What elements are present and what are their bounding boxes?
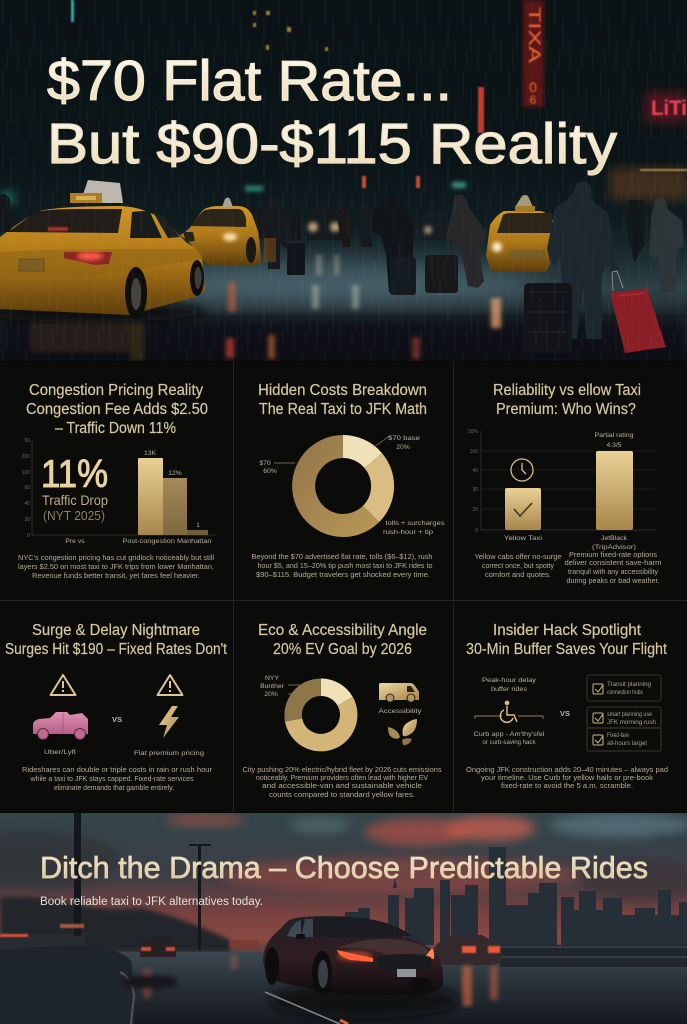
bar chart: 40 (24, 501, 30, 507)
body text: hour $5, and 15–20% tip push most taxi to JFK rides to (258, 561, 432, 570)
bar chart: 1 (196, 522, 200, 529)
icon: van: Accessibility (378, 708, 422, 715)
body text: NYC's congestion pricing has cut gridlock noticeably but still (18, 553, 214, 562)
body text (242, 765, 442, 799)
heading: Surge & Delay Nightmare (32, 622, 200, 639)
body text: Beyond the $70 advertised flat rate, tolls ($6–$12), rush (252, 552, 432, 561)
bar chart: 50% (468, 429, 479, 435)
lamp posts (74, 810, 211, 950)
body text: your timeline. Use Curb for yellow hails or pre-book (481, 773, 653, 782)
taxi: third, right (486, 195, 554, 272)
wheels (312, 951, 332, 995)
icon: warning right (158, 675, 182, 695)
premium text: deliver consistent save-harm (564, 558, 662, 567)
vs label: VS (560, 709, 570, 718)
bar chart: 4.3/5 (606, 442, 622, 449)
donut labels (259, 435, 445, 536)
bar chart: 20 (472, 507, 478, 513)
checklist: connection hubs (607, 690, 643, 696)
left note: or curb-saving hack (482, 739, 536, 746)
heading (258, 382, 427, 418)
bar chart: Post-congestion Manhattan (122, 538, 212, 545)
panel: hidden costs (234, 362, 453, 600)
body text: and accessible-van and sustainable vehicle (262, 781, 422, 790)
bar chart: 0 (27, 533, 30, 539)
icon: check mark (514, 503, 532, 516)
labels: Uber/Lyft (44, 749, 76, 756)
checklist: Transit planning (607, 682, 651, 688)
travellers with luggage (0, 182, 684, 353)
heading: The Real Taxi to JFK Math (259, 401, 427, 418)
bar chart: 30 (472, 487, 478, 493)
heading: – Traffic Down 11% (55, 420, 176, 437)
heading (466, 622, 668, 658)
left barrier (0, 934, 134, 1024)
clouds (0, 813, 687, 902)
black sedan (263, 916, 443, 996)
wet road reflections (30, 255, 501, 360)
donut label: 20% (264, 691, 278, 698)
bar chart: 100 (470, 449, 478, 455)
donut labels: 20% (396, 444, 410, 451)
shadow under car (270, 982, 460, 1018)
panel: surge and delay (0, 601, 233, 812)
bar chart: Pre vs (65, 538, 85, 545)
body text (22, 765, 213, 792)
body text: fixed-rate to avoid the 5 a.m. scramble. (501, 781, 633, 790)
stat: 11% traffic drop (41, 453, 108, 523)
premium text (564, 550, 662, 585)
heading (258, 622, 427, 658)
right guard rail (500, 945, 687, 967)
donut label (260, 675, 300, 698)
checklist: all-hours target (607, 741, 647, 747)
road (118, 952, 687, 1024)
neon signs: TIXA (525, 7, 544, 64)
taillight (64, 252, 112, 265)
donut labels: rush-hour + tip (383, 529, 433, 536)
icon: van (378, 683, 422, 715)
neon signs: 6 (530, 93, 537, 107)
donut labels: 60% (263, 468, 277, 475)
donut chart (304, 446, 383, 525)
labels (44, 749, 204, 757)
plate (19, 259, 44, 271)
bar chart: 20 (24, 517, 30, 523)
hero title: $70 Flat Rate... (47, 49, 452, 113)
body text: counts compared to standard yellow fares. (269, 790, 415, 799)
heading (26, 382, 208, 437)
checklist: smart planning use (607, 712, 653, 718)
heading: 20% EV Goal by 2026 (273, 641, 412, 658)
icon: pink car (33, 712, 88, 740)
neon signs: LiTi (651, 97, 687, 120)
left note: Curb app - Am'thy'sfel (474, 731, 545, 738)
neon signs: 0 (529, 79, 537, 95)
donut labels: tolls + surcharges (386, 520, 445, 527)
body text: Revenue funds better transit, yet fares feel heavier. (32, 571, 200, 580)
hero title (47, 49, 618, 176)
premium text: during peaks or bad weather. (566, 576, 660, 585)
footer subtext: Book reliable taxi to JFK alternatives today. (40, 896, 263, 908)
wheels (125, 267, 147, 319)
plate (397, 969, 416, 977)
heading: Reliability vs ellow Taxi (493, 382, 641, 399)
donut chart (293, 687, 349, 743)
bar chart: JetBlack (601, 535, 628, 542)
panel: insider hack (454, 601, 687, 812)
icon: clock (511, 459, 533, 481)
yellow taxi text (474, 552, 562, 579)
premium text: tranquil with any accessibility (568, 567, 658, 576)
bar chart: 40 (472, 468, 478, 474)
skyline (345, 847, 687, 945)
donut label: Bunther (260, 683, 285, 690)
heading: Insider Hack Spotlight (493, 622, 642, 639)
bar chart (468, 429, 655, 551)
footer heading: Ditch the Drama – Choose Predictable Rides (40, 850, 648, 885)
labels: Flat premium pricing (134, 750, 204, 757)
left note (474, 677, 545, 746)
body text: Ongoing JFK construction adds 20–40 minutes – always pad (466, 765, 668, 774)
body text (18, 553, 214, 580)
checklist (587, 675, 661, 751)
yellow taxi text: comfort and quotes. (485, 570, 551, 579)
bar chart: (TripAdvisor) (592, 544, 636, 551)
panel: eco and accessibility (234, 601, 453, 812)
second car (434, 935, 502, 965)
vs label: VS (112, 715, 122, 724)
building window lights (253, 11, 328, 51)
checklist: JFK morning rush (607, 720, 656, 726)
yellow taxi text: correct once, but spotty (482, 561, 554, 570)
body text (252, 552, 432, 579)
bar chart: 200 (22, 454, 30, 460)
background car (305, 218, 447, 240)
heading: Surges Hit $190 – Fixed Rates Don't (5, 641, 228, 658)
stat: 11% traffic drop: 11% (41, 453, 108, 496)
panel: congestion pricing (0, 362, 233, 600)
heading: 30-Min Buffer Saves Your Flight (466, 641, 668, 658)
bar chart (22, 438, 215, 545)
hill and treeline, left (0, 897, 230, 952)
heading: Hidden Costs Breakdown (258, 382, 427, 399)
body text: $90–$115. Budget travelers get shocked every time. (256, 570, 430, 579)
body text: while a taxi to JFK stays capped. Fixed-rate services (30, 774, 194, 783)
footer: dusk highway scene (0, 810, 687, 1024)
checklist: Fixed-fare (607, 733, 630, 739)
stat: 11% traffic drop: Traffic Drop (42, 492, 108, 508)
bar chart: 50 (24, 438, 30, 444)
heading (5, 622, 228, 658)
stat: 11% traffic drop: (NYT 2025) (43, 508, 105, 523)
neon signs (71, 0, 687, 133)
yellow taxi text: Yellow cabs offer no-surge (474, 552, 562, 561)
road mist (120, 263, 540, 303)
icon: wheelchair (475, 701, 543, 722)
bar chart: 0 (475, 528, 478, 534)
left note: buffer rides (491, 686, 528, 693)
headlights (337, 950, 373, 962)
bar chart: 12% (168, 470, 182, 477)
body text: noticeably. Premium providers often lead with higher EV (256, 773, 428, 782)
distant traffic (60, 924, 258, 957)
bar chart: Yellow Taxi (504, 535, 543, 542)
icon: warning left (50, 675, 76, 695)
heading: Eco & Accessibility Angle (258, 622, 427, 639)
hero: rainy taxi street scene (0, 0, 687, 364)
panel: reliability (454, 362, 687, 600)
icon: lightning bolt (159, 706, 179, 738)
premium text: Premium fixed-rate options (569, 550, 657, 559)
body text (466, 765, 668, 790)
grille (377, 954, 431, 971)
storefront glow (610, 168, 687, 200)
hero title: But $90-$115 Reality (47, 112, 618, 176)
body text: layers $2.50 on most taxi to JFK trips from lower Manhattan. (18, 562, 214, 571)
donut labels: $70 (259, 460, 271, 467)
bar chart: Partial rating (594, 432, 634, 439)
donut label: NYY (265, 675, 279, 682)
taxi: main yellow cab, left (0, 180, 205, 322)
icon: leaves (388, 719, 417, 745)
lane marking (265, 992, 340, 1024)
donut labels: $70 base (388, 435, 420, 442)
heading (493, 382, 641, 418)
heading: Premium: Who Wins? (496, 401, 636, 418)
bar chart: 13K (144, 450, 157, 457)
taxi roof sign (80, 180, 123, 203)
left note: Peak-hour delay (482, 677, 537, 684)
bar chart: 100 (22, 470, 30, 476)
body text: eliminate demands that gamble entirely. (54, 783, 174, 792)
body text: Rideshares can double or triple costs in rain or rush hour (22, 765, 213, 774)
heading: Congestion Pricing Reality (29, 382, 203, 399)
heading: Congestion Fee Adds $2.50 (26, 401, 208, 418)
taxi: second, centre-left (180, 198, 261, 265)
bar chart: 60 (24, 485, 30, 491)
road reflections (122, 955, 498, 1006)
body text: City pushing 20% electric/hybrid fleet by 2026 cuts emissions (242, 765, 442, 774)
